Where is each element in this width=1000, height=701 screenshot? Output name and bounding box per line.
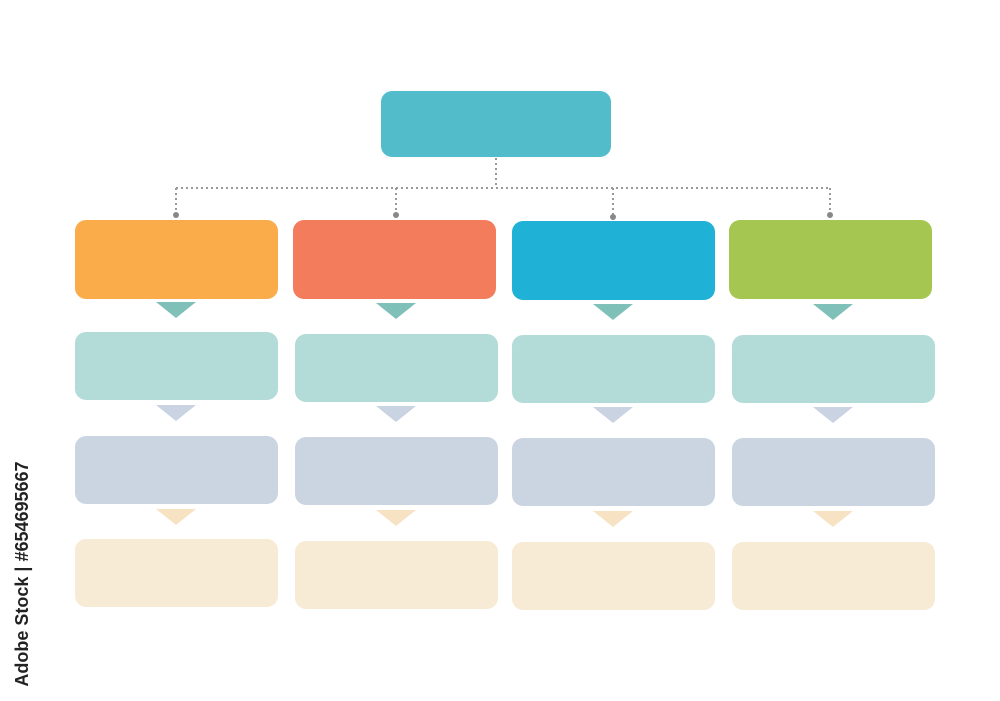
vertical stock text: Adobe Stock | #654695667	[12, 461, 32, 687]
column 1	[75, 220, 278, 607]
column 3	[512, 221, 715, 610]
column 2	[293, 220, 498, 609]
column 4	[729, 220, 935, 610]
top box	[381, 91, 611, 157]
